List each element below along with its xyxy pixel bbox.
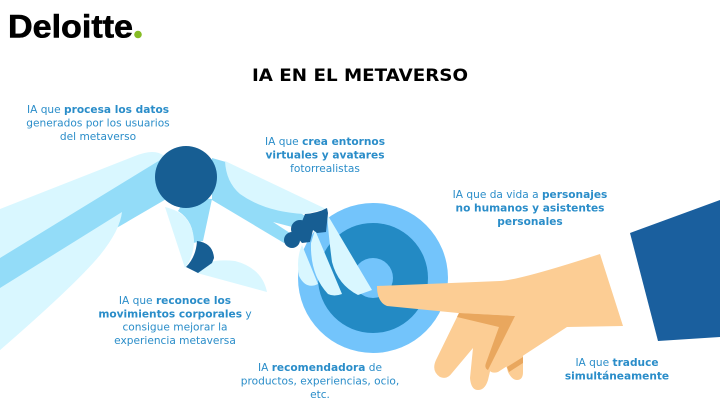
finger blade 2 bbox=[311, 230, 342, 296]
text: recommender: productos, experiencias, ocio, bbox=[241, 376, 399, 388]
small finger shadow bbox=[507, 357, 523, 372]
logo: Deloitte: Deloitte bbox=[8, 8, 133, 44]
text: recommender: etc. bbox=[310, 389, 330, 401]
text: translates: IA que traduce bbox=[575, 357, 659, 369]
forearm bbox=[212, 158, 305, 243]
finger blade 1 bbox=[327, 214, 372, 295]
text: gives life to characters: IA que da vida a personajes bbox=[453, 189, 607, 201]
text: recognizes movements: IA que reconoce los bbox=[119, 295, 231, 307]
finger blade 3 bbox=[298, 245, 318, 286]
text: processes data: IA que procesa los datos bbox=[27, 104, 169, 116]
palm and index finger bbox=[377, 254, 623, 373]
text: creates environments: IA que crea entornos bbox=[265, 136, 385, 148]
text: recommender: IA recomendadora de bbox=[258, 362, 382, 374]
text: creates environments: virtuales y avatares bbox=[265, 150, 385, 162]
lower hand light panel bbox=[197, 260, 267, 292]
palm shadow bbox=[457, 313, 515, 370]
sleeve bbox=[630, 200, 720, 341]
shoulder joint bbox=[155, 146, 217, 208]
text: recognizes movements: consigue mejorar la bbox=[122, 322, 228, 334]
illustration: robot arm bbox=[0, 152, 326, 350]
text: translates: simultáneamente bbox=[565, 370, 669, 382]
robot fingers bbox=[284, 208, 372, 296]
text: recognizes movements: movimientos corporales bbox=[98, 308, 242, 320]
target circles bbox=[298, 203, 448, 353]
text: gives life to characters: personales bbox=[497, 216, 563, 228]
upper arm light panels bbox=[0, 152, 164, 350]
text: processes data: generados por los usuarios bbox=[26, 118, 170, 130]
lower joint bbox=[186, 241, 214, 273]
back fingers bbox=[434, 313, 523, 390]
forearm light panel bbox=[225, 161, 326, 214]
text: creates environments: fotorrealistas bbox=[290, 163, 360, 175]
human hand bbox=[377, 254, 623, 390]
wrist light panel bbox=[165, 207, 194, 268]
text: processes data: del metaverso bbox=[60, 131, 136, 143]
upper arm bbox=[0, 157, 168, 289]
title: IA EN EL METAVERSO bbox=[252, 66, 468, 86]
white gap in forearm bbox=[273, 222, 296, 235]
text: recognizes movements: experiencia metaversa bbox=[114, 335, 236, 347]
text: gives life to characters: no humanos y asistentes bbox=[456, 202, 604, 214]
robot hand dark bbox=[284, 208, 328, 248]
text: recognizes movements: y bbox=[245, 308, 252, 320]
wrist bbox=[178, 198, 212, 243]
